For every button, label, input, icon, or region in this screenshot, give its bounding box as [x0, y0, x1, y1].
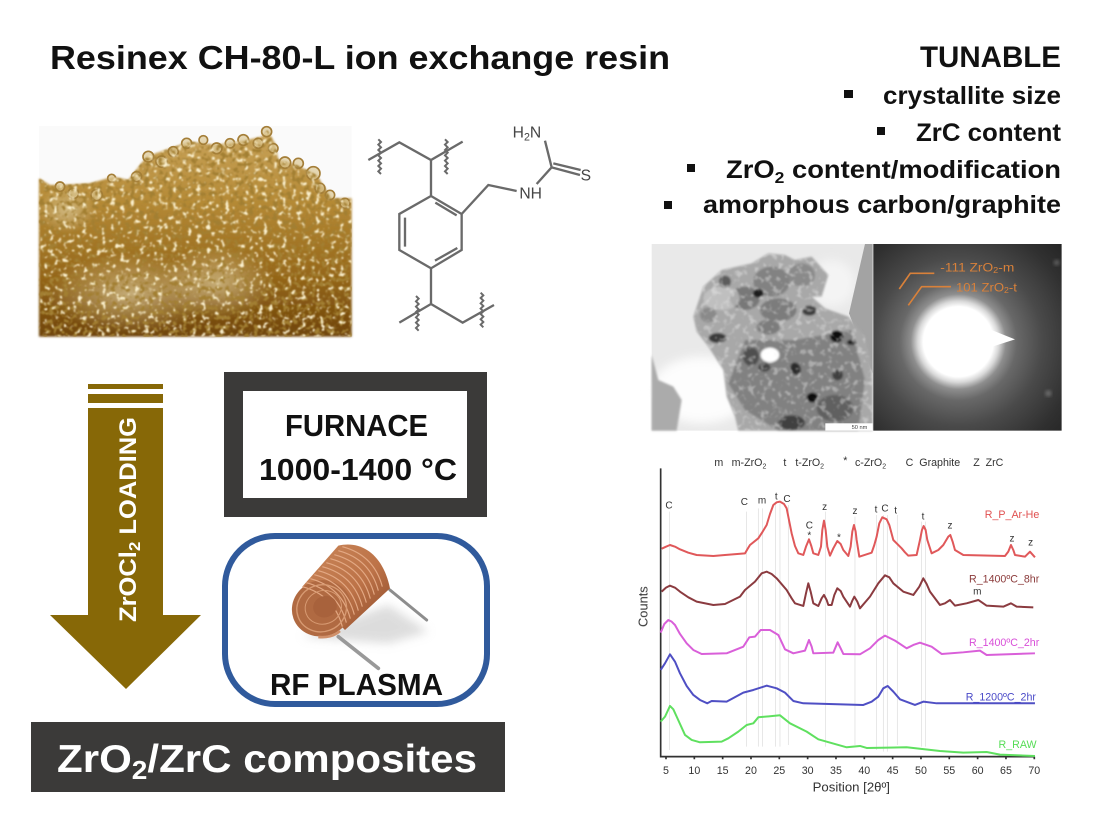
x-axis tick labels: 50: [915, 765, 927, 777]
peak labels: *: [807, 531, 811, 542]
legend: c-ZrO: [855, 457, 882, 469]
label: H2N: N: [530, 125, 541, 142]
peak labels: *: [837, 533, 841, 544]
furnace label: FURNACE: [285, 408, 428, 443]
list item: crystallite size: crystallite size: [883, 82, 1061, 110]
legend: 2: [762, 463, 766, 470]
banner: composites: /ZrC composites: [147, 738, 477, 781]
legend: C: [906, 457, 914, 469]
legend: Graphite: [919, 457, 960, 469]
label: S: S: [581, 168, 591, 185]
x-axis tick labels: 65: [1000, 765, 1012, 777]
label: H2N: H: [513, 125, 524, 142]
peak labels: t: [894, 505, 897, 516]
x-axis tick labels: 30: [802, 765, 814, 777]
x-axis tick labels: 55: [943, 765, 955, 777]
annotation: -111 ZrO2-m: [899, 261, 1014, 289]
list item: ZrO2 content/modification: 2: [775, 170, 784, 187]
diffraction pattern: SAED: [873, 244, 1062, 431]
chemical structure: thiourea-functional resin: [368, 125, 591, 331]
legend: t: [783, 457, 786, 469]
x-axis tick labels: 60: [972, 765, 984, 777]
series labels: R_1200ºC_2hr: [966, 692, 1036, 704]
peak labels: t: [775, 491, 778, 502]
micrograph: TEM: [652, 244, 873, 431]
panel: furnace: [224, 372, 487, 517]
list item: amorphous carbon/graphite: amorphous carbon/graphite: [703, 191, 1061, 219]
curve: R_1200C_2hr: [661, 654, 1035, 705]
annotation: 101 ZrO2-t: 2: [1004, 286, 1010, 295]
annotation: 101 ZrO2-t: [908, 281, 1018, 305]
heading: tunable: TUNABLE: [920, 41, 1061, 74]
list item: ZrO2 content/modification: content/modification: [784, 156, 1061, 184]
legend: [714, 455, 1004, 470]
series labels: R_RAW: [999, 739, 1038, 751]
x-axis tick labels: 35: [830, 765, 842, 777]
peak labels: z: [947, 521, 952, 532]
peak labels: z: [852, 506, 857, 517]
legend: Z: [973, 457, 980, 469]
x-axis tick labels: 25: [773, 765, 785, 777]
scale bar: [825, 423, 873, 431]
banner: composites: [31, 722, 505, 792]
legend: 2: [820, 463, 824, 470]
photo: resin beads: [37, 126, 352, 337]
list item: ZrO2 content/modification: ZrO: [726, 156, 770, 184]
list item: ZrO2 content/modification: [687, 156, 1061, 187]
peak labels: t: [875, 505, 878, 516]
icon: copper coil: [284, 544, 428, 668]
peak labels: m: [758, 495, 766, 506]
panel: tunable properties list: [664, 41, 1062, 219]
y-axis title: Counts: [636, 586, 650, 627]
list item: ZrC content: ZrC content: [916, 119, 1062, 147]
peak labels: z: [1009, 534, 1014, 545]
arrow: ZrOCl2 loading: [50, 384, 201, 689]
x-axis tick labels: 45: [887, 765, 899, 777]
curve: R_P_Ar-He: [662, 502, 1035, 557]
arrow label: ZrOCl: [115, 555, 142, 622]
annotation: 101 ZrO2-t: 101 ZrO: [956, 281, 1000, 295]
curve: R_1400C_2hr: [661, 620, 1035, 655]
title: Resinex CH-80-L ion exchange resin: [50, 39, 670, 76]
x-axis title: Position [2θº]: [813, 781, 890, 795]
annotation: 101 ZrO2-t: -t: [1009, 281, 1018, 295]
peak labels: C: [806, 521, 813, 532]
peak labels: C: [665, 501, 673, 512]
x-axis tick labels: 40: [858, 765, 870, 777]
legend: 2: [882, 463, 886, 470]
axes: [661, 468, 1035, 759]
legend: ZrC: [986, 457, 1004, 469]
arrow label: LOADING: [115, 417, 142, 542]
banner: composites: 2: [132, 755, 147, 785]
label: NH: NH: [519, 185, 542, 202]
chart: XRD patterns: [636, 455, 1040, 795]
legend: t-ZrO: [795, 457, 820, 469]
peak labels: z: [1028, 538, 1033, 549]
peak labels: C: [881, 504, 889, 515]
peak labels: C: [783, 494, 791, 505]
curve: R_1400C_8hr: [662, 572, 1033, 608]
beads along the silhouette: [55, 127, 350, 208]
scale bar: 50 nm: [852, 425, 868, 431]
banner: composites: ZrO: [57, 738, 126, 781]
label: H2N: 2: [524, 132, 530, 144]
series labels: R_1400ºC_8hr: [969, 574, 1040, 586]
legend: *: [843, 455, 847, 467]
legend: m-ZrO: [732, 457, 762, 469]
plasma label: RF PLASMA: [270, 667, 443, 702]
x-axis tick labels: 15: [717, 765, 729, 777]
series labels: [966, 509, 1040, 751]
furnace temperature: 1000-1400 °C: [259, 452, 457, 487]
peak labels: z: [822, 502, 827, 513]
peak labels: t: [922, 511, 925, 522]
series labels: R_1400ºC_2hr: [969, 637, 1040, 649]
arrow label: 2: [127, 542, 144, 551]
annotation: -111 ZrO2-m: -111 ZrO: [940, 261, 986, 275]
peak labels: C: [741, 497, 748, 508]
x-axis tick labels: 10: [688, 765, 700, 777]
legend: m: [714, 457, 723, 469]
annotation: -111 ZrO2-m: 2: [993, 266, 999, 275]
series labels: R_P_Ar-He: [985, 509, 1039, 521]
x-axis tick labels: 70: [1028, 765, 1040, 777]
x-axis tick labels: 20: [745, 765, 757, 777]
x-axis tick labels: [663, 765, 1040, 777]
panel: RF plasma: [225, 536, 487, 704]
curve: R_RAW: [661, 706, 1035, 756]
peak labels: [665, 491, 1033, 598]
peak labels: m: [973, 587, 981, 598]
annotation: -111 ZrO2-m: -m: [998, 261, 1014, 275]
x-axis tick labels: 5: [663, 765, 669, 777]
